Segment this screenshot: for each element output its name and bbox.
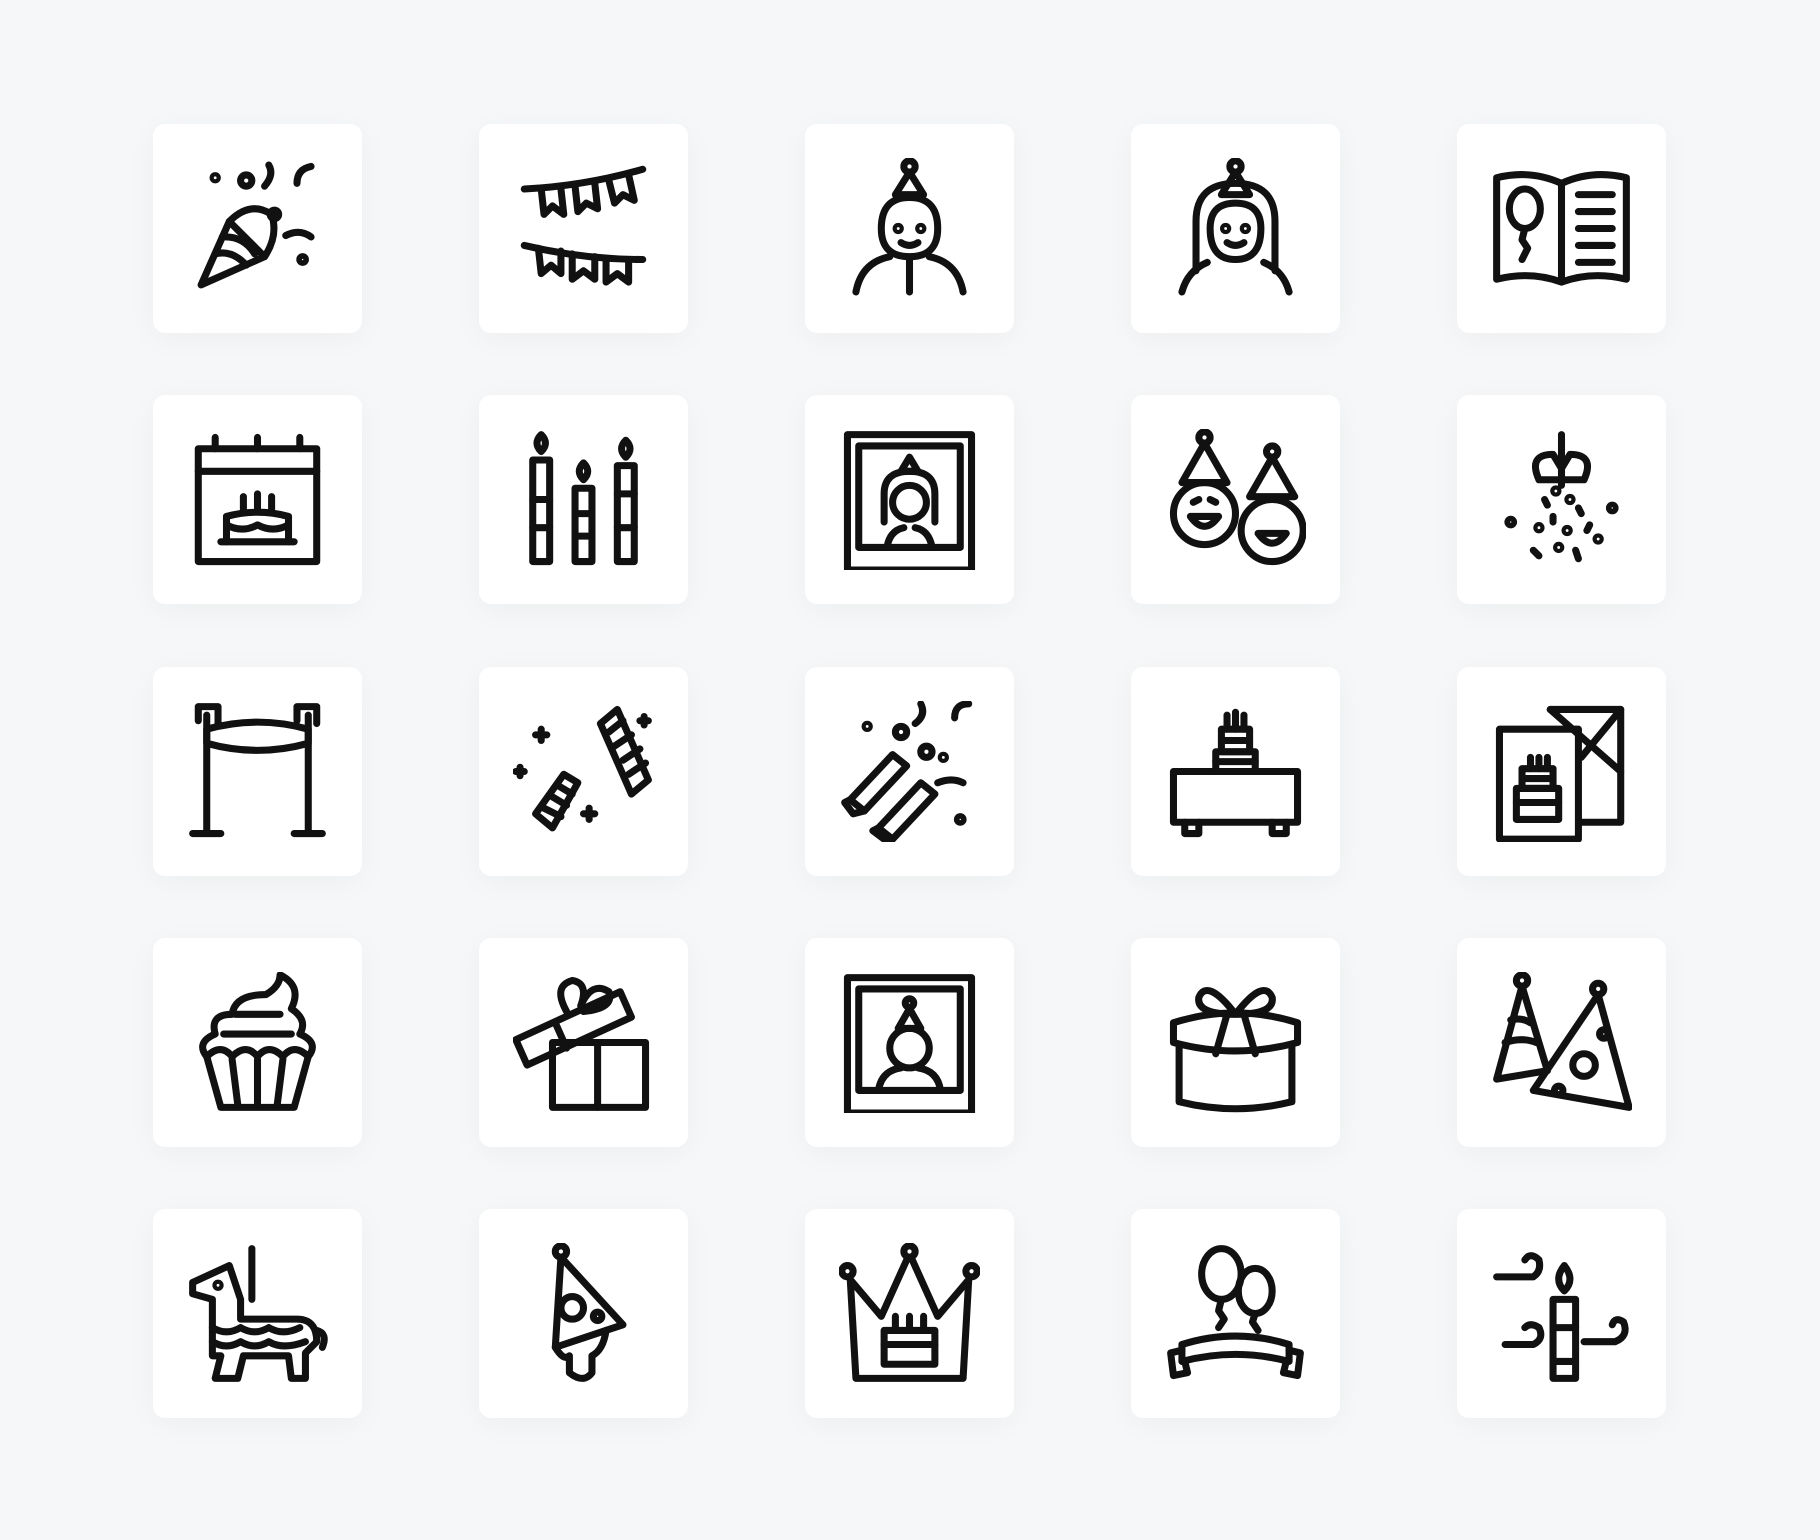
- tile: card book: [1457, 124, 1666, 333]
- tile: calendar cake: [153, 395, 362, 604]
- tile: candles: [479, 395, 688, 604]
- tile: ribbon poles: [153, 667, 362, 876]
- tile: card envelope: [1457, 667, 1666, 876]
- tile: pinata confetti: [1457, 395, 1666, 604]
- tile: party popper: [153, 124, 362, 333]
- tile: table cake: [1131, 667, 1340, 876]
- tile: boy: [805, 124, 1014, 333]
- tile: cupcake: [153, 938, 362, 1147]
- tile: two faces with hats: [1131, 395, 1340, 604]
- tile: pinata donkey: [153, 1209, 362, 1418]
- tile: hat with drip: [479, 1209, 688, 1418]
- tile: crown: [805, 1209, 1014, 1418]
- tile: photo frame girl: [805, 395, 1014, 604]
- tile: crackers: [805, 667, 1014, 876]
- tile: open gift: [479, 938, 688, 1147]
- tile: bunting: [479, 124, 688, 333]
- tile: streamers: [479, 667, 688, 876]
- tile: photo boy: [805, 938, 1014, 1147]
- tile: girl: [1131, 124, 1340, 333]
- tile: round gift box: [1131, 938, 1340, 1147]
- tile: balloons banner: [1131, 1209, 1340, 1418]
- tile: two hats: [1457, 938, 1666, 1147]
- tile: candle blowers: [1457, 1209, 1666, 1418]
